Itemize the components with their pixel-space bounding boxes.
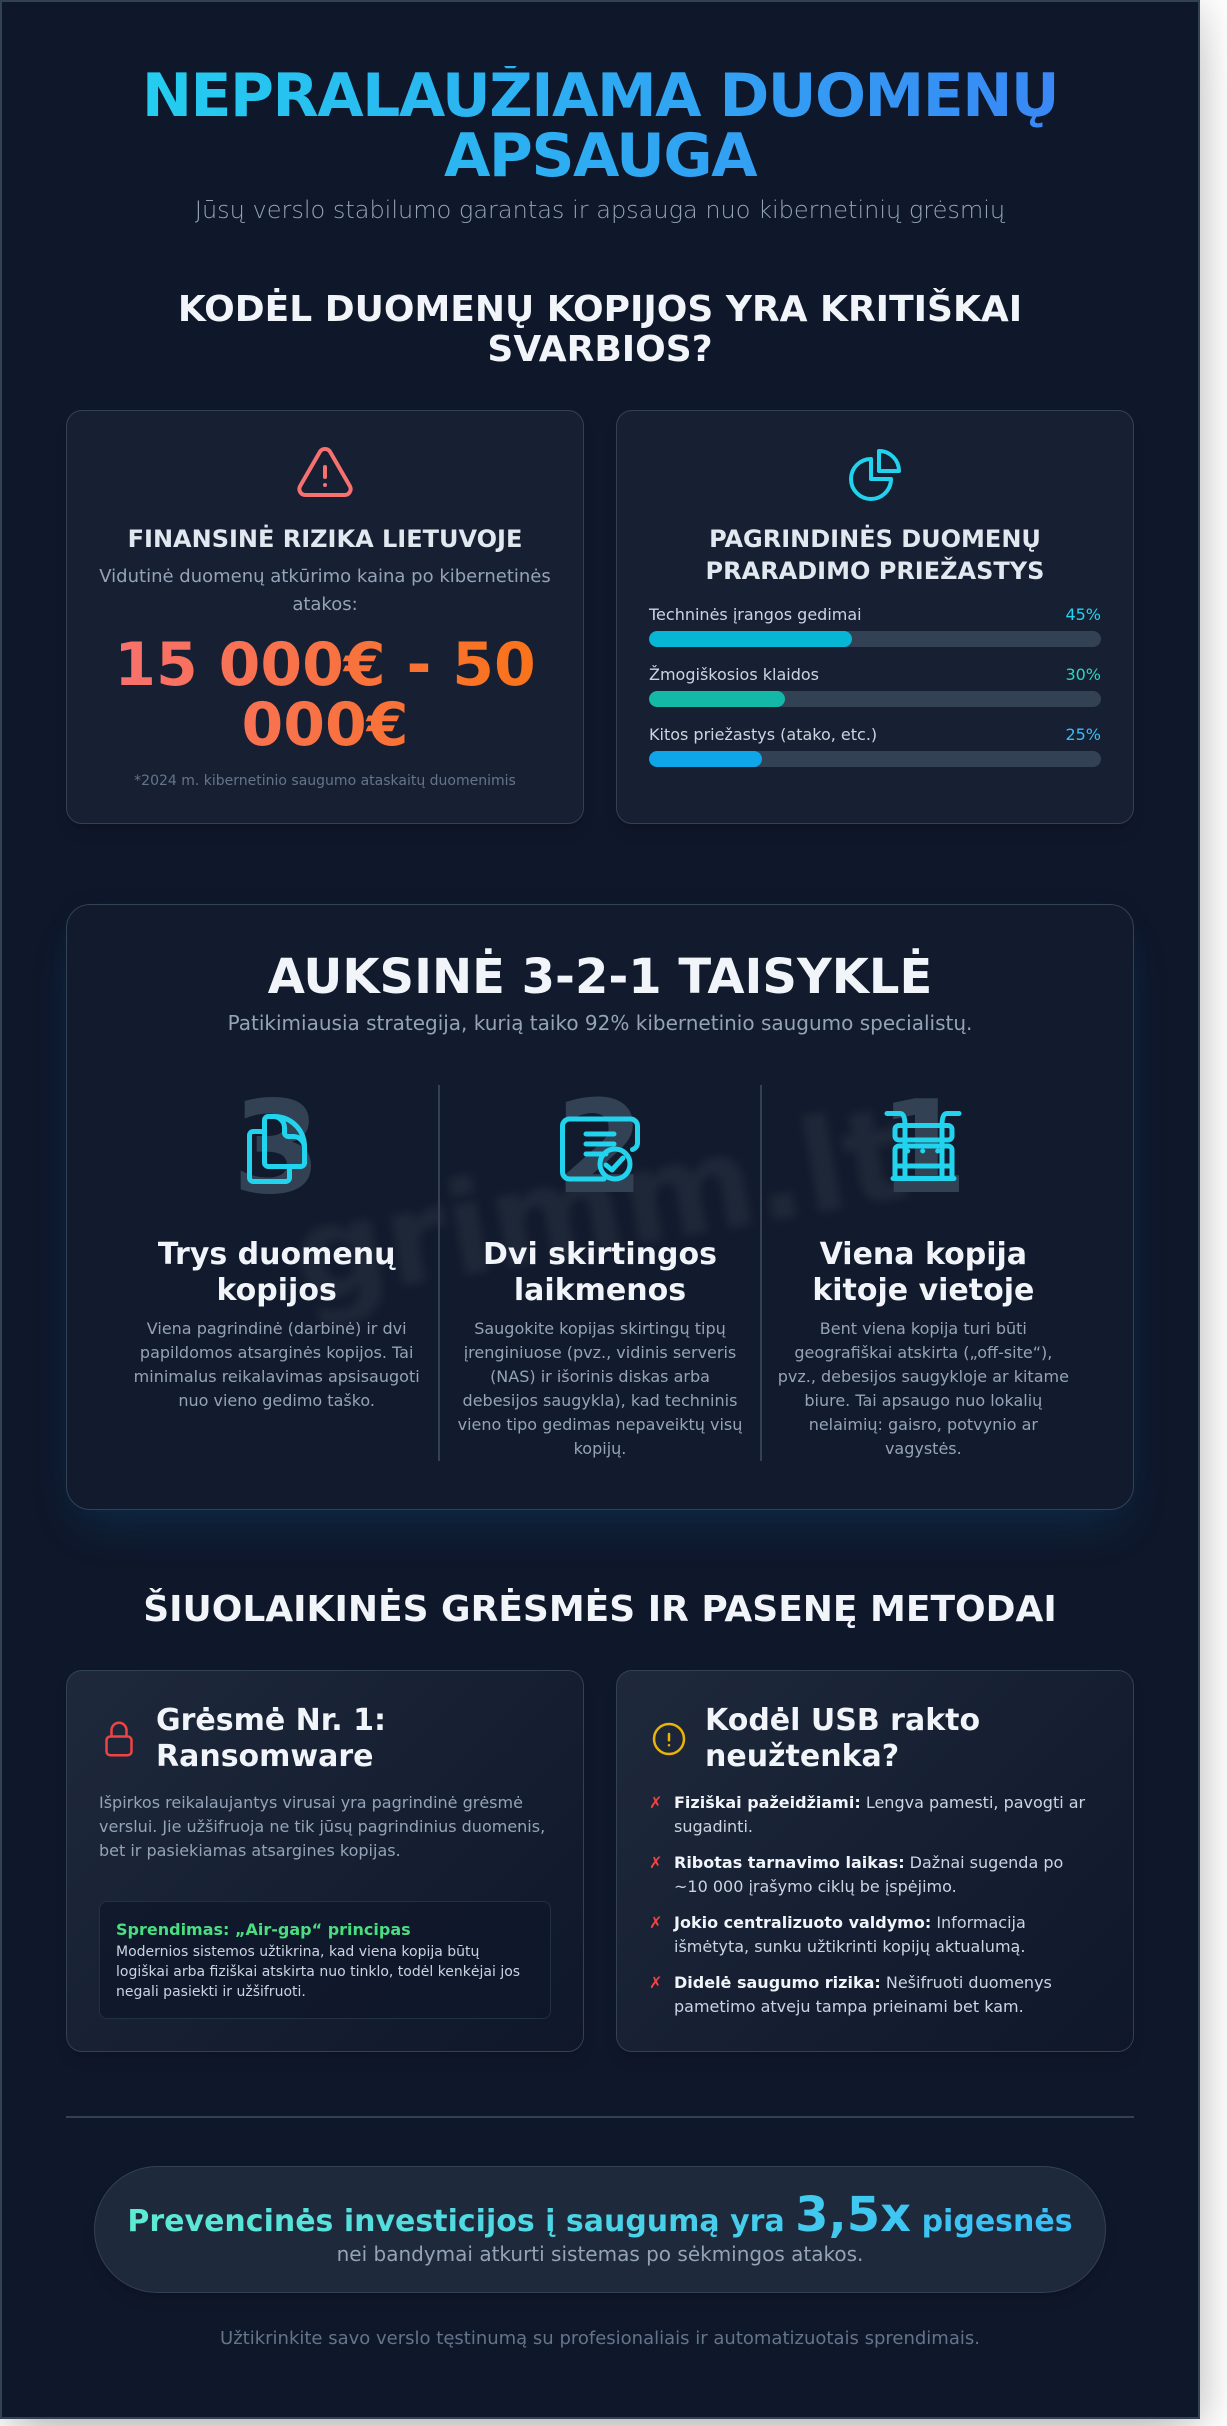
callout: air-gap solution: Sprendimas: „Air-gap“ principas <box>116 1920 411 1939</box>
column text <box>778 1319 1069 1458</box>
column title: Dvi skirtingos <box>483 1237 717 1272</box>
footnote: *2024 m. kibernetinio saugumo ataskaitų duomenimis <box>134 773 516 789</box>
callout subline: nei bandymai atkurti sistemas po sėkmingos atakos. <box>337 2242 863 2266</box>
panel: financial risk <box>66 410 584 824</box>
list item: sugadinti. <box>674 1817 753 1836</box>
bar: other causes 25% <box>649 725 1101 767</box>
card title: PAGRINDINĖS DUOMENŲ <box>709 525 1041 553</box>
ransomware description <box>99 1793 545 1860</box>
bar: other causes 25%: 25% <box>1065 725 1101 744</box>
number 2 with media icon: 2 <box>555 1074 645 1223</box>
card title <box>156 1703 386 1774</box>
title <box>66 66 1134 186</box>
bar: hardware failures 45% <box>648 605 1101 647</box>
section heading: AUKSINĖ 3-2-1 TAISYKLĖ <box>268 949 932 1005</box>
card title: neužtenka? <box>705 1739 899 1774</box>
icon: pie chart <box>849 449 901 501</box>
list item <box>649 1913 1026 1956</box>
big cost number: 000€ <box>242 690 408 760</box>
ransomware description: Išpirkos reikalaujantys virusai yra pagrindinė grėsmė <box>99 1793 523 1812</box>
column: one offsite <box>778 1074 1069 1458</box>
callout: prevention is cheaper <box>94 2166 1106 2293</box>
big cost number: 15 000€ - 50 <box>114 630 536 700</box>
column text: įrenginiuose (pvz., vidinis serveris <box>464 1343 736 1362</box>
callout: air-gap solution: negali pasiekti ir užšifruoti. <box>116 1984 306 2000</box>
column text: vagystės. <box>885 1439 962 1458</box>
card title <box>706 524 1044 585</box>
heading: why backups matter: KODĖL DUOMENŲ KOPIJOS YRA KRITIŠKAI <box>178 289 1022 330</box>
column text: pvz., debesijos saugykloje ar kitame <box>778 1367 1069 1386</box>
three rule columns <box>134 1074 1069 1461</box>
card description: Vidutinė duomenų atkūrimo kaina po kibernetinės <box>99 566 551 587</box>
heading: modern threats: ŠIUOLAIKINĖS GRĖSMĖS IR PASENĘ METODAI <box>143 1589 1057 1630</box>
list item <box>649 1973 1052 2016</box>
column text: Viena pagrindinė (darbinė) ir dvi <box>147 1319 407 1338</box>
column text: kopijų. <box>574 1439 626 1458</box>
number 1 with server icon: 1 <box>879 1074 968 1223</box>
heading: why backups matter <box>178 288 1022 370</box>
column text: debesijos saugykla), kad techninis <box>463 1391 737 1410</box>
column text: papildomos atsarginės kopijos. Tai <box>140 1343 413 1362</box>
title: APSAUGA <box>444 121 756 191</box>
card title: Grėsmė Nr. 1: <box>156 1703 386 1738</box>
heading: why backups matter: SVARBIOS? <box>487 329 713 370</box>
bar: hardware failures 45%: 45% <box>1065 605 1101 624</box>
panel: ransomware <box>66 1670 584 2052</box>
big cost number <box>99 635 551 755</box>
column title: kitoje vietoje <box>812 1273 1034 1308</box>
list of USB drawbacks <box>649 1793 1086 2016</box>
number 3 with copy icon: 3 <box>232 1074 321 1223</box>
section: threats cards <box>66 1670 1134 2052</box>
panel: golden 3-2-1 rule <box>66 904 1134 1510</box>
subtitle: Jūsų verslo stabilumo garantas ir apsauga nuo kibernetinių grėsmių <box>195 196 1005 224</box>
bar: human errors 30%: 30% <box>1065 665 1101 684</box>
column title: Viena kopija <box>820 1237 1027 1272</box>
list item: ✗ <box>649 1853 662 1872</box>
callout: air-gap solution: Modernios sistemos užtikrina, kad viena kopija būtų <box>116 1944 479 1960</box>
list item: Fiziškai pažeidžiami: Lengva pamesti, pavogti ar <box>674 1793 1085 1812</box>
section: why backups cards <box>66 410 1134 824</box>
column: three copies <box>134 1074 420 1410</box>
column text: vieno tipo gedimas nepaveiktų visų <box>458 1415 742 1434</box>
column text: minimalus reikalavimas apsisaugoti <box>134 1367 420 1386</box>
ransomware description: verslui. Jie užšifruoja ne tik jūsų pagrindinius duomenis, <box>99 1817 545 1836</box>
column title: kopijos <box>217 1273 337 1308</box>
column text: nelaimių: gaisro, potvynio ar <box>809 1415 1038 1434</box>
list item: Didelė saugumo rizika: Nešifruoti duomenys <box>674 1973 1052 1992</box>
column text: biure. Tai apsaugo nuo lokalių <box>804 1391 1042 1410</box>
USB header <box>652 1703 980 1774</box>
card title: Ransomware <box>156 1739 374 1774</box>
list item: ✗ <box>649 1973 662 1992</box>
bar: other causes 25%: Kitos priežastys (atako, etc.) <box>649 725 877 744</box>
ransomware description: bet ir pasiekiamas atsargines kopijas. <box>99 1841 401 1860</box>
list item: išmėtyta, sunku užtikrinti kopijų aktualumą. <box>674 1937 1025 1956</box>
column text: (NAS) ir išorinis diskas arba <box>490 1367 710 1386</box>
card description <box>99 566 551 615</box>
column title <box>812 1237 1034 1308</box>
column title <box>483 1237 717 1308</box>
list item: ~10 000 įrašymo ciklų be įspėjimo. <box>674 1877 957 1896</box>
footer text: Užtikrinkite savo verslo tęstinumą su profesionaliais ir automatizuotais sprendimais. <box>220 2328 980 2349</box>
column title <box>158 1237 396 1308</box>
column title: laikmenos <box>514 1273 686 1308</box>
column title: Trys duomenų <box>158 1237 395 1272</box>
callout headline: Prevencinės investicijos į saugumą yra 3,5x pigesnės <box>127 2187 1073 2243</box>
column text: nuo vieno gedimo taško. <box>178 1391 375 1410</box>
callout: air-gap solution: logiškai arba fiziškai atskirta nuo tinklo, todėl kenkėjai jos <box>116 1964 520 1980</box>
ransomware header <box>105 1703 386 1774</box>
panel: data loss causes <box>616 410 1134 824</box>
icon: warning triangle <box>297 447 353 497</box>
column text: Bent viena kopija turi būti <box>820 1319 1027 1338</box>
icon: exclamation circle <box>652 1722 686 1756</box>
card title: Kodėl USB rakto <box>705 1703 980 1738</box>
watermark: grimm.lt <box>282 1079 918 1334</box>
list item: ✗ <box>649 1793 662 1812</box>
list item: Ribotas tarnavimo laikas: Dažnai sugenda po <box>674 1853 1063 1872</box>
callout: air-gap solution <box>99 1901 551 2019</box>
title: NEPRALAUŽIAMA DUOMENŲ <box>142 61 1058 131</box>
column text: geografiškai atskirta („off-site“), <box>794 1343 1052 1362</box>
bar: human errors 30% <box>649 665 1101 707</box>
card title <box>705 1703 980 1774</box>
list item <box>649 1853 1063 1896</box>
section subtitle: Patikimiausia strategija, kurią taiko 92% kibernetinio saugumo specialistų. <box>228 1011 972 1035</box>
bar: human errors 30%: Žmogiškosios klaidos <box>649 665 819 684</box>
column text <box>134 1319 420 1410</box>
column text <box>458 1319 742 1458</box>
card description: atakos: <box>292 594 358 615</box>
icon: lock <box>105 1722 133 1756</box>
list item <box>649 1793 1086 1836</box>
card title: PRARADIMO PRIEŽASTYS <box>706 557 1044 585</box>
bar: hardware failures 45%: Techninės įrangos gedimai <box>649 605 862 624</box>
column: two media <box>438 1085 762 1461</box>
card title: FINANSINĖ RIZIKA LIETUVOJE <box>128 525 522 553</box>
column text: Saugokite kopijas skirtingų tipų <box>474 1319 726 1338</box>
panel: why USB is not enough <box>616 1670 1134 2052</box>
list item: Jokio centralizuoto valdymo: Informacija <box>674 1913 1026 1932</box>
list item: ✗ <box>649 1913 662 1932</box>
list item: pametimo atveju tampa prieinami bet kam. <box>674 1997 1024 2016</box>
